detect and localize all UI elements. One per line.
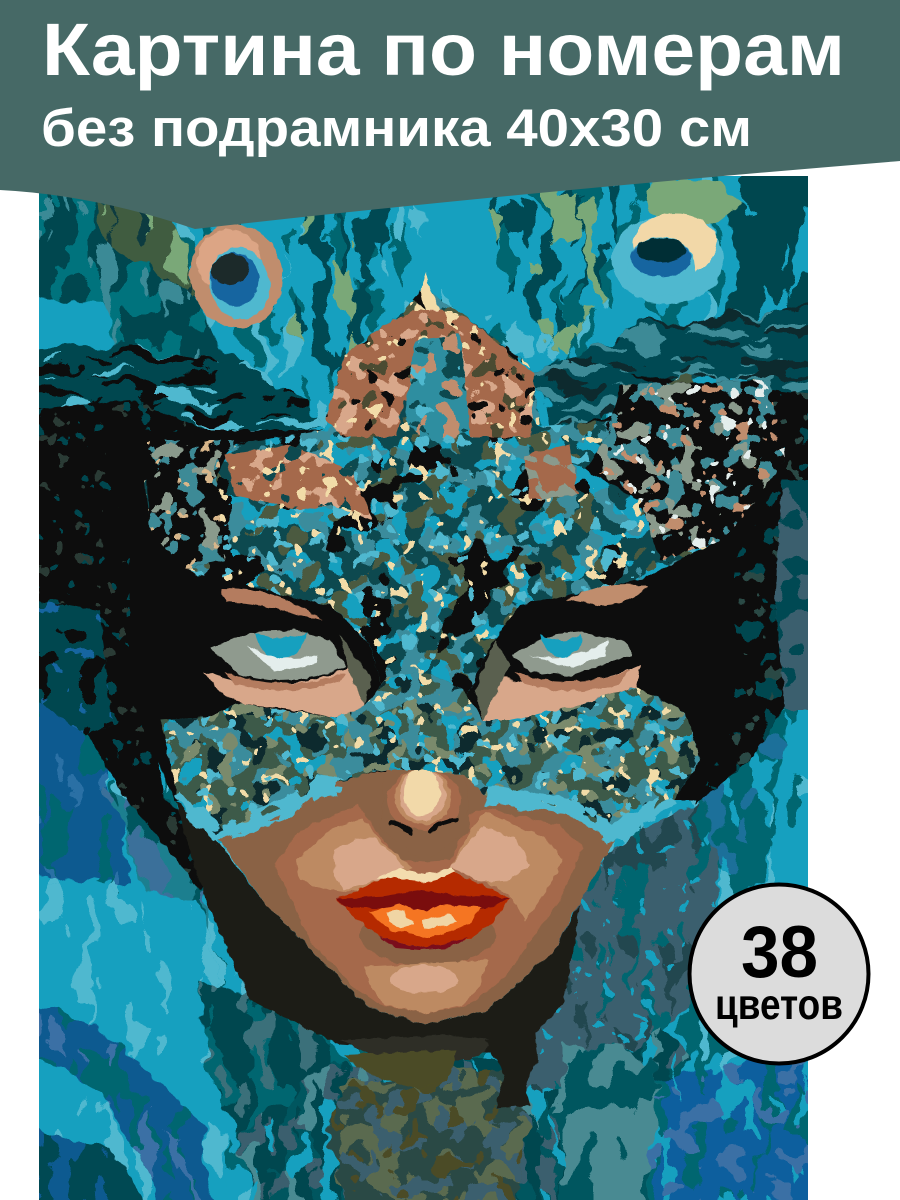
cheek right xyxy=(451,812,563,920)
neck olive xyxy=(343,1050,456,1090)
right eye xyxy=(474,632,641,721)
nostrils xyxy=(391,820,456,832)
dark shadow below chin xyxy=(175,800,580,1055)
upper mask jewels xyxy=(145,290,785,700)
peacock eye: right xyxy=(612,213,724,304)
peacock eye: left xyxy=(188,224,283,329)
lower lip shadow xyxy=(359,924,496,965)
painting: masked woman with peacock feathers xyxy=(39,176,808,1200)
badge label: цветов xyxy=(715,981,843,1029)
colour count badge xyxy=(690,884,868,1064)
dark mask backing xyxy=(100,400,790,800)
subtitle: без подрамника 40х30 см xyxy=(41,99,752,158)
mask crown bronze xyxy=(325,273,535,448)
right neck dark xyxy=(485,1030,538,1108)
mask dark side jewels right xyxy=(585,380,785,560)
mask bronze right lobe xyxy=(525,445,578,500)
left eye xyxy=(203,628,372,718)
cheek left xyxy=(296,818,412,892)
badge number: 38 xyxy=(741,912,818,993)
neck shadow xyxy=(340,1035,500,1060)
header banner xyxy=(0,0,900,229)
nose xyxy=(387,768,461,830)
lower mask jewels xyxy=(161,673,700,837)
dark hair right xyxy=(630,375,820,805)
nose shade xyxy=(386,770,470,838)
dark hair left xyxy=(39,400,206,890)
mask lower edge xyxy=(177,785,674,837)
cheek highlights xyxy=(334,826,530,890)
eyelids xyxy=(222,585,648,620)
face mid tone xyxy=(274,805,583,1013)
mask dark side jewels left xyxy=(145,440,235,570)
title: Картина по номерам xyxy=(42,8,845,91)
feather background xyxy=(39,176,808,1200)
face base xyxy=(218,771,616,1024)
mask bronze left lobe xyxy=(225,445,372,520)
chin xyxy=(364,960,488,1013)
lips xyxy=(336,867,510,950)
black band across eyes xyxy=(198,578,640,666)
hair and details xyxy=(30,213,820,1108)
